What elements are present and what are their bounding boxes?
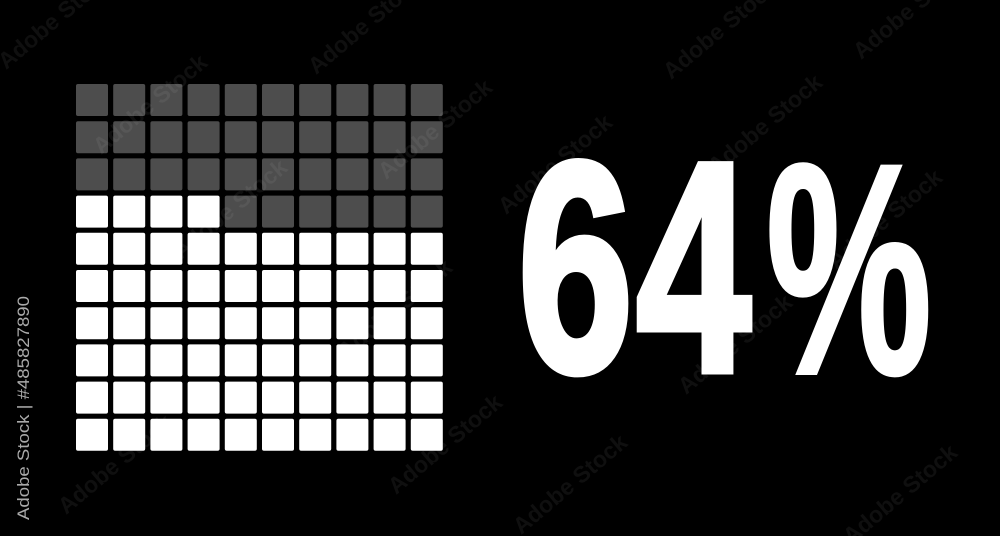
unfilled squares: rows 1-3 and the right part of row 4 bbox=[76, 84, 443, 228]
filled squares: 64 white bbox=[76, 196, 443, 451]
watermark pattern: Adobe Stock bbox=[88, 49, 212, 159]
watermark pattern: Adobe Stock bbox=[673, 289, 797, 399]
watermark pattern: Adobe Stock bbox=[493, 109, 617, 219]
big percentage value 64%: 6 bbox=[518, 99, 633, 435]
watermark pattern: Adobe Stock bbox=[168, 154, 292, 264]
watermark pattern: Adobe Stock bbox=[333, 254, 457, 364]
watermark pattern: Adobe Stock bbox=[53, 409, 177, 519]
watermark pattern: Adobe Stock bbox=[508, 429, 632, 536]
watermark pattern: Adobe Stock bbox=[703, 69, 827, 179]
big percentage value 64%: % bbox=[766, 102, 932, 437]
watermark pattern: Adobe Stock bbox=[373, 74, 497, 184]
watermark pattern: Adobe Stock bbox=[823, 164, 947, 274]
watermark pattern: Adobe Stock bbox=[383, 389, 507, 499]
vertical credit line: Adobe Stock | #485827890 bbox=[14, 296, 33, 520]
big percentage value 64%: 4 bbox=[636, 100, 752, 435]
big percentage value 64% bbox=[518, 99, 932, 437]
waffle chart: 64 of 100 squares filled bbox=[76, 84, 443, 451]
